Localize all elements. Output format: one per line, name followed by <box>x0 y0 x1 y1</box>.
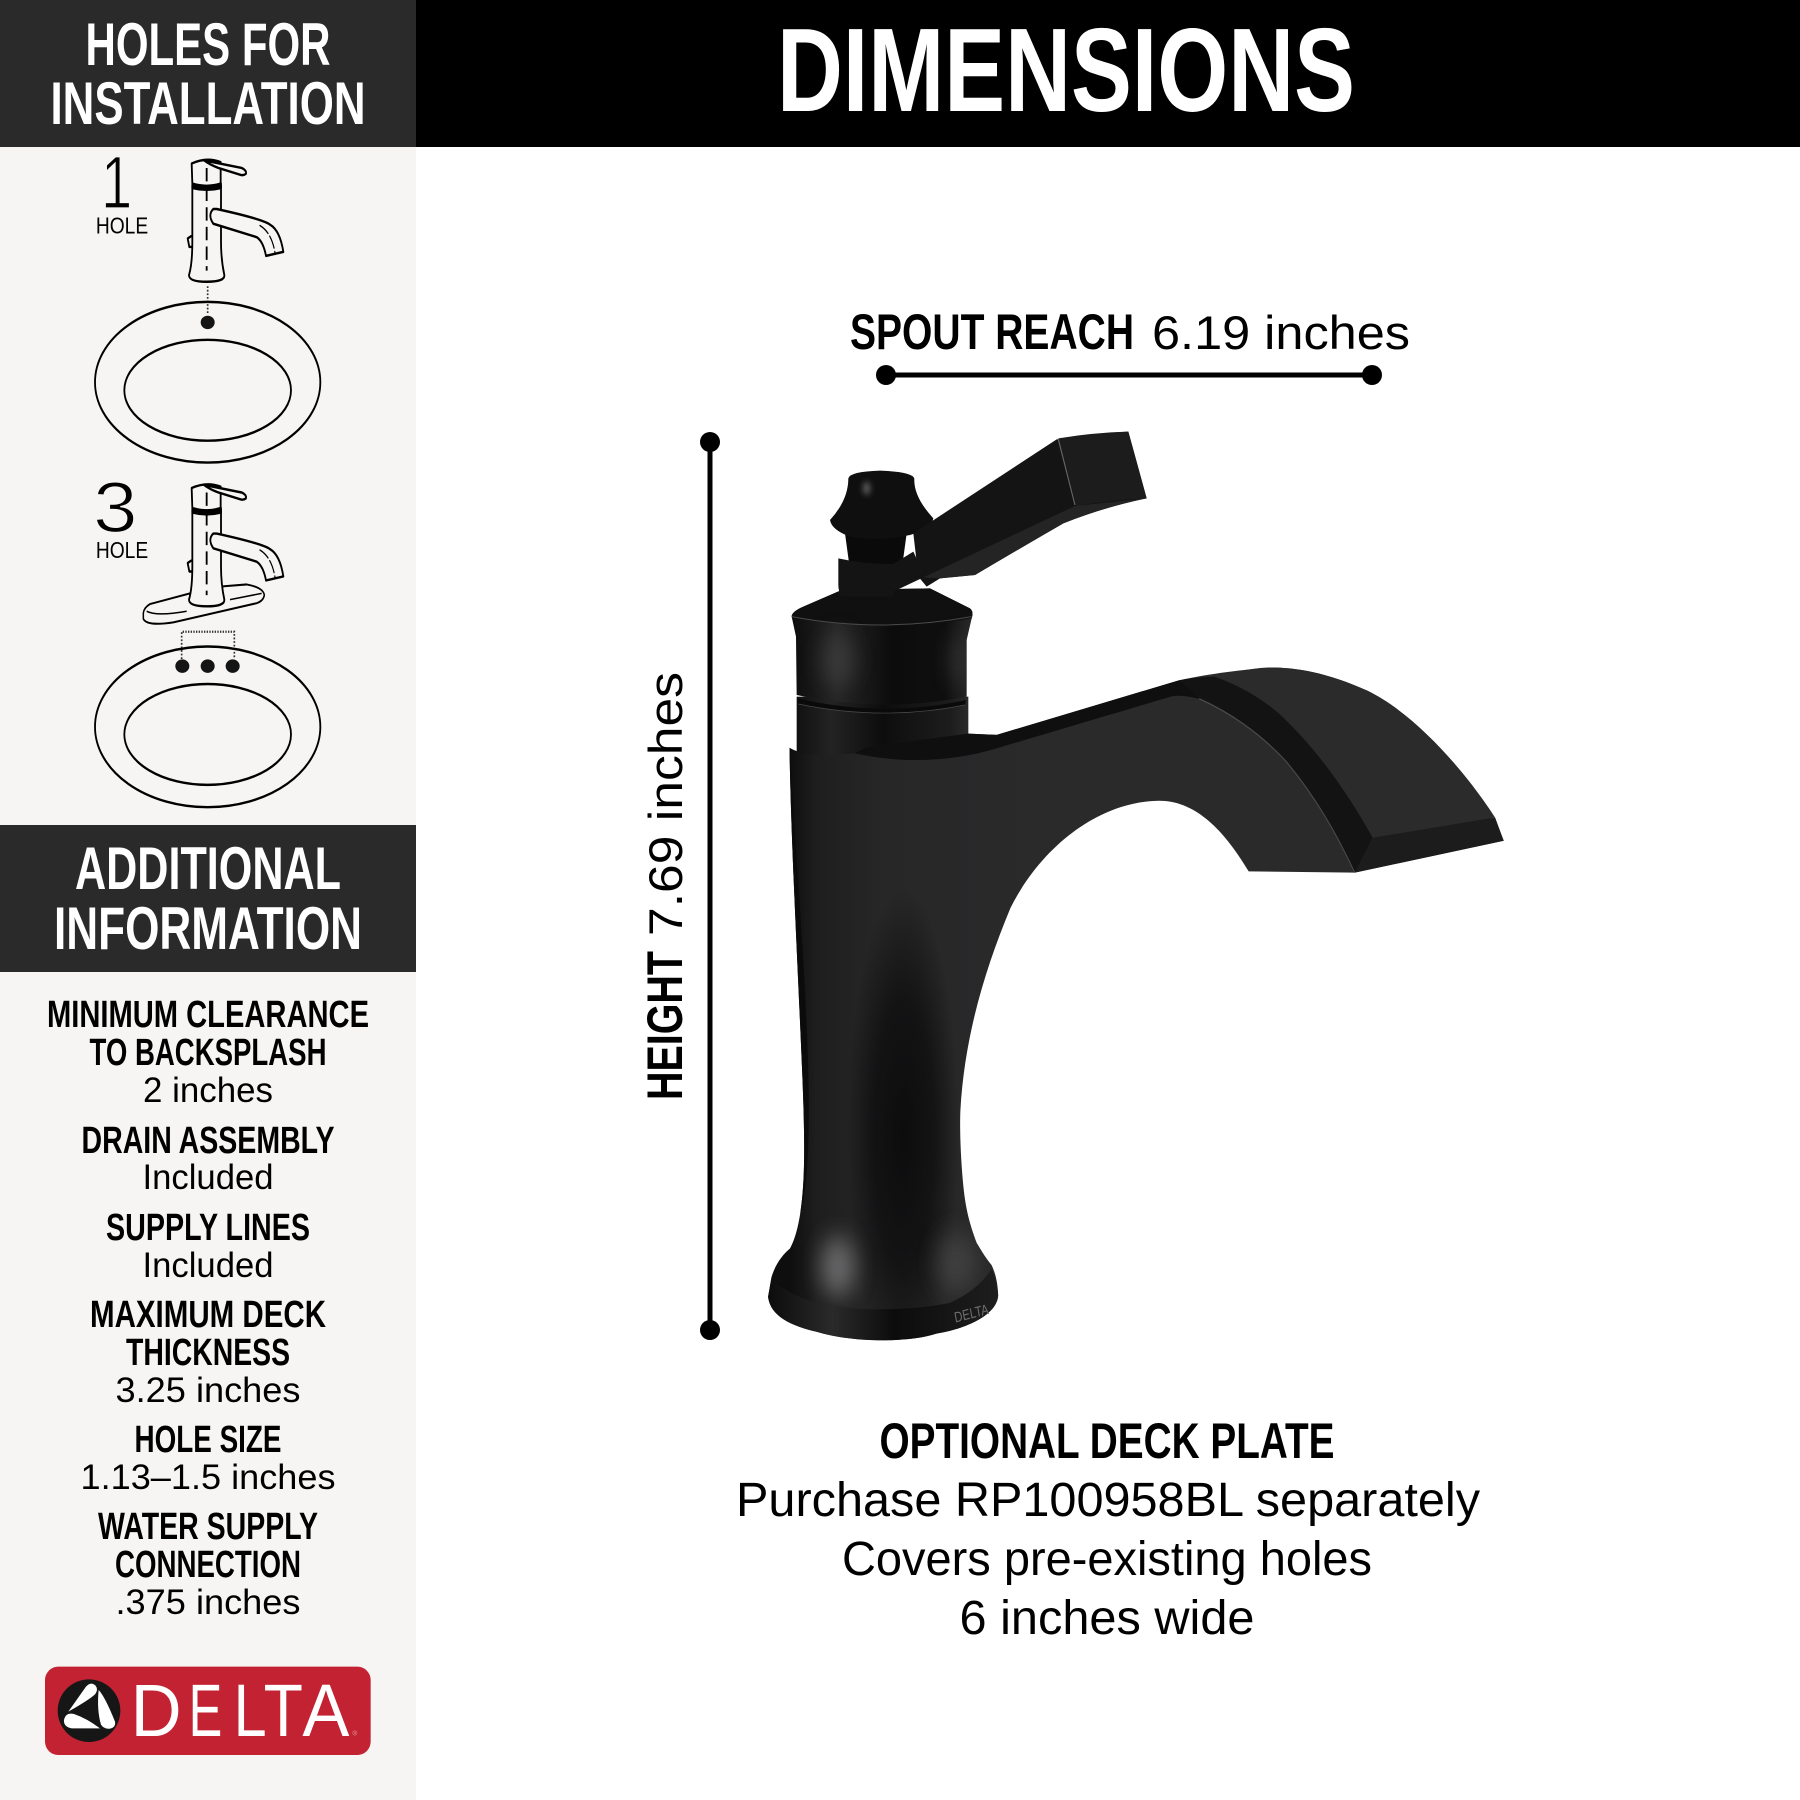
text block: water supply connection: WATER SUPPLY <box>98 1506 318 1548</box>
text block: hole size <box>80 1419 336 1497</box>
text block: supply lines: SUPPLY LINES <box>106 1207 310 1249</box>
logo: delta: A <box>302 1669 350 1752</box>
text block: hole size: HOLE SIZE <box>134 1419 282 1461</box>
faucet engraved brand: DELTA <box>953 1301 990 1326</box>
faucet collar, knob and lever <box>792 432 1147 713</box>
spout facets <box>1214 668 1495 838</box>
text block: minimum clearance: TO BACKSPLASH <box>90 1032 326 1074</box>
label: spout reach: 6.19 inches <box>1152 306 1410 359</box>
label: height: 7.69 inches <box>639 672 692 936</box>
heading: holes for installation <box>0 0 416 147</box>
label: height: HEIGHT <box>637 951 693 1100</box>
title: dimensions: DIMENSIONS <box>777 4 1355 137</box>
label: spout reach <box>850 304 1410 360</box>
heading: holes for installation: HOLES FOR <box>86 11 330 78</box>
product photo: faucet <box>768 432 1504 1380</box>
logo: delta: ® <box>352 1730 357 1738</box>
arrow: height dimension line <box>700 432 720 1340</box>
heading: additional information <box>0 825 416 972</box>
text block: minimum clearance: 2 inches <box>143 1071 273 1110</box>
title: dimensions <box>416 0 1800 147</box>
text block: supply lines <box>106 1207 310 1285</box>
text block: drain assembly <box>82 1120 334 1197</box>
text block: maximum deck thickness <box>90 1294 326 1410</box>
text block: optional deck plate: Covers pre-existing holes <box>842 1533 1372 1586</box>
text block: water supply connection <box>98 1506 318 1622</box>
text block: maximum deck thickness: 3.25 inches <box>116 1371 300 1410</box>
logo: delta: D <box>131 1669 182 1752</box>
logo: delta: T <box>264 1669 303 1752</box>
base flange <box>768 1269 998 1340</box>
text block: minimum clearance <box>47 994 369 1110</box>
text block: supply lines: Included <box>142 1246 274 1285</box>
heading: additional information: ADDITIONAL <box>75 835 341 902</box>
text block: water supply connection: .375 inches <box>116 1583 300 1622</box>
text block: optional deck plate <box>736 1413 1480 1645</box>
logo: delta: E <box>189 1669 222 1752</box>
diagram: three hole installation: 3 <box>93 468 137 548</box>
diagram: one hole installation: HOLE <box>96 213 148 239</box>
diagram: three hole installation <box>93 468 320 807</box>
heading: holes for installation: INSTALLATION <box>50 70 366 137</box>
arrow: spout reach dimension line <box>876 365 1382 385</box>
logo: delta <box>45 1667 371 1755</box>
text block: water supply connection: CONNECTION <box>115 1544 301 1586</box>
text block: hole size: 1.13–1.5 inches <box>80 1458 336 1497</box>
text block: minimum clearance: MINIMUM CLEARANCE <box>47 994 369 1036</box>
panel: left sidebar <box>0 0 416 1800</box>
text block: optional deck plate: Purchase RP100958BL separately <box>736 1474 1480 1527</box>
diagram: one hole installation <box>95 140 320 463</box>
label: spout reach: SPOUT REACH <box>850 304 1134 360</box>
faucet body and spout <box>768 668 1504 1380</box>
diagram: three hole installation: HOLE <box>96 538 148 564</box>
text block: drain assembly: DRAIN ASSEMBLY <box>82 1120 334 1162</box>
text block: optional deck plate: 6 inches wide <box>960 1592 1254 1645</box>
diagram: one hole installation: 1 <box>101 140 132 224</box>
text block: maximum deck thickness: THICKNESS <box>126 1332 290 1374</box>
faucet lower valve ring <box>797 697 968 757</box>
heading: additional information: INFORMATION <box>54 895 362 962</box>
text block: drain assembly: Included <box>142 1158 274 1197</box>
text block: optional deck plate: OPTIONAL DECK PLATE <box>880 1413 1334 1469</box>
logo: delta: L <box>234 1669 267 1752</box>
text block: maximum deck thickness: MAXIMUM DECK <box>90 1294 326 1336</box>
label: height <box>637 672 693 1100</box>
